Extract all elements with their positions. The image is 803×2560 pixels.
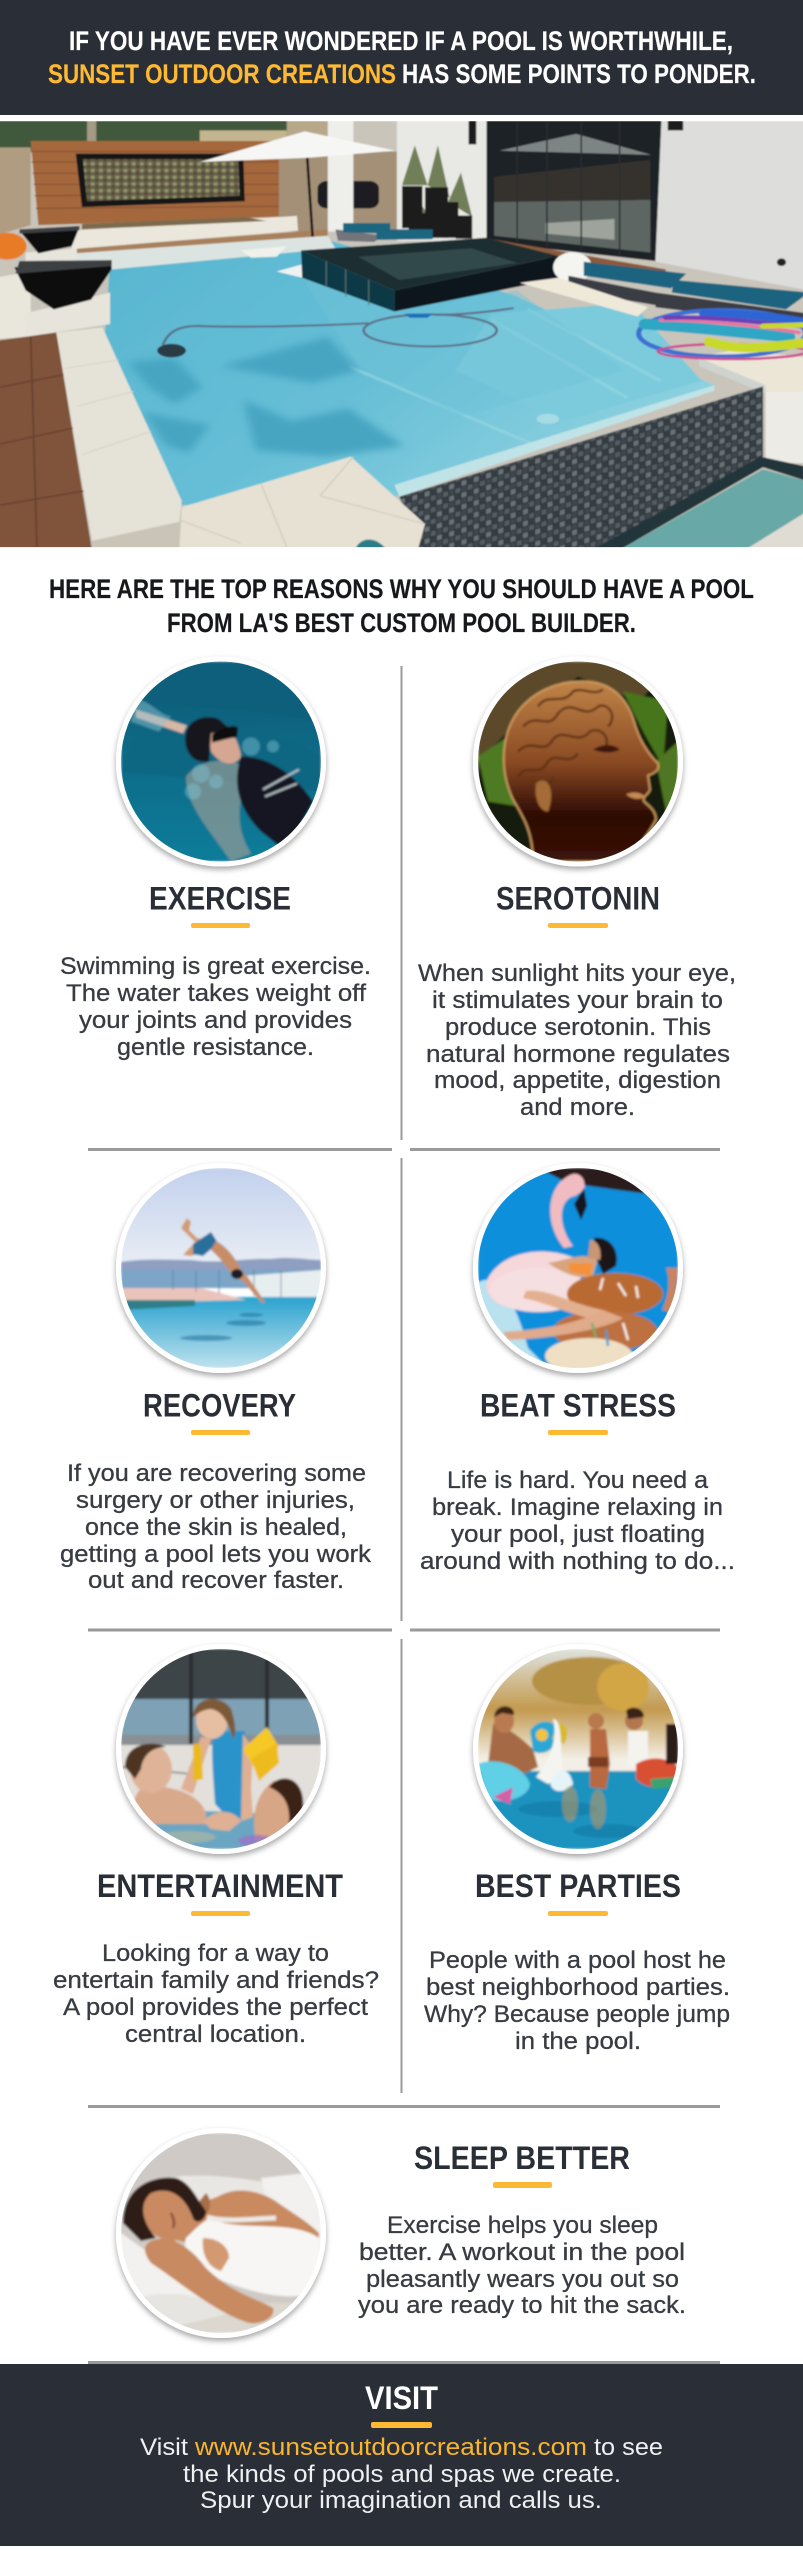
body text: People with a pool host he — [429, 1947, 726, 1974]
photo: diver — [116, 1163, 326, 1373]
body text — [60, 1460, 372, 1594]
footer text — [140, 2434, 663, 2514]
accent bar — [548, 1911, 608, 1916]
footer text: www.sunsetoutdoorcreations.com — [194, 2434, 587, 2461]
body text: best neighborhood parties. — [426, 1974, 730, 2001]
heading: EXERCISE — [149, 880, 291, 916]
body text: gentle resistance. — [117, 1034, 314, 1061]
accent bar — [548, 923, 608, 928]
body text: entertain family and friends? — [53, 1967, 379, 1994]
header banner — [0, 0, 803, 115]
body text: Looking for a way to — [102, 1940, 329, 1967]
body text: it stimulates your brain to — [432, 987, 723, 1014]
body text: in the pool. — [515, 2028, 641, 2055]
body text: natural hormone regulates — [426, 1041, 730, 1068]
footer accent bar — [371, 2422, 432, 2428]
heading: SEROTONIN — [496, 880, 660, 916]
body text: and more. — [520, 1094, 635, 1121]
body text: out and recover faster. — [88, 1567, 344, 1594]
panel: exercise — [60, 656, 371, 1061]
body text — [420, 1467, 735, 1575]
heading: BEST PARTIES — [475, 1868, 681, 1904]
photo: floats in pool — [473, 1163, 683, 1374]
body text: pleasantly wears you out so — [366, 2266, 679, 2293]
body text — [60, 953, 371, 1061]
panel: serotonin — [418, 656, 736, 1121]
body text: The water takes weight off — [66, 980, 366, 1007]
body text: once the skin is healed, — [85, 1514, 347, 1541]
panel: best parties — [424, 1644, 730, 2055]
body text: If you are recovering some — [67, 1460, 366, 1487]
footer text: Visit — [140, 2434, 188, 2461]
footer heading: VISIT — [365, 2380, 438, 2416]
body text: break. Imagine relaxing in — [432, 1494, 723, 1521]
header line two — [48, 59, 756, 89]
heading: BEAT STRESS — [480, 1388, 676, 1424]
body text — [358, 2212, 686, 2319]
header line two: SUNSET OUTDOOR CREATIONS — [48, 59, 396, 89]
photo: family in pool — [116, 1644, 326, 1854]
body text: Why? Because people jump — [424, 2001, 730, 2028]
section heading: FROM LA'S BEST CUSTOM POOL BUILDER. — [167, 608, 636, 638]
body text: around with nothing to do... — [420, 1548, 735, 1575]
body text — [418, 960, 736, 1121]
footer text: to see — [594, 2434, 663, 2461]
heading: SLEEP BETTER — [414, 2140, 630, 2176]
body text: mood, appetite, digestion — [434, 1067, 721, 1094]
heading: RECOVERY — [143, 1388, 296, 1424]
hero photo: backyard pool — [0, 118, 803, 551]
body text — [53, 1940, 379, 2048]
footer text: the kinds of pools and spas we create. — [183, 2461, 621, 2488]
footer text: Spur your imagination and calls us. — [200, 2487, 602, 2514]
photo: swimmer — [116, 656, 326, 866]
body text: surgery or other injuries, — [76, 1487, 355, 1514]
body text: A pool provides the perfect — [63, 1994, 368, 2021]
panel: recovery — [60, 1163, 372, 1594]
accent bar — [493, 2182, 552, 2188]
body text: better. A workout in the pool — [359, 2239, 685, 2266]
body text: Life is hard. You need a — [447, 1467, 709, 1494]
photo: sleeping woman — [116, 2128, 326, 2338]
grid dividers — [88, 666, 720, 2364]
body text: your joints and provides — [79, 1007, 352, 1034]
photo: glowing head — [473, 656, 683, 866]
body text: you are ready to hit the sack. — [358, 2292, 686, 2319]
accent bar — [191, 1430, 250, 1435]
body text: getting a pool lets you work — [60, 1541, 372, 1568]
photo: pool party — [473, 1644, 683, 1854]
accent bar — [548, 1430, 608, 1435]
body text: produce serotonin. This — [445, 1014, 711, 1041]
heading: ENTERTAINMENT — [97, 1868, 343, 1904]
body text: Exercise helps you sleep — [387, 2212, 658, 2239]
body text: central location. — [125, 2021, 306, 2048]
section heading — [49, 574, 754, 638]
accent bar — [191, 923, 250, 928]
body text: When sunlight hits your eye, — [418, 960, 736, 987]
panel: beat stress — [420, 1163, 735, 1575]
panel: entertainment — [53, 1644, 379, 2048]
panel: sleep better — [116, 2128, 686, 2338]
body text: Swimming is great exercise. — [60, 953, 371, 980]
body text: your pool, just floating — [451, 1521, 705, 1548]
body text — [424, 1947, 730, 2055]
footer banner — [0, 2364, 803, 2546]
accent bar — [191, 1911, 250, 1916]
